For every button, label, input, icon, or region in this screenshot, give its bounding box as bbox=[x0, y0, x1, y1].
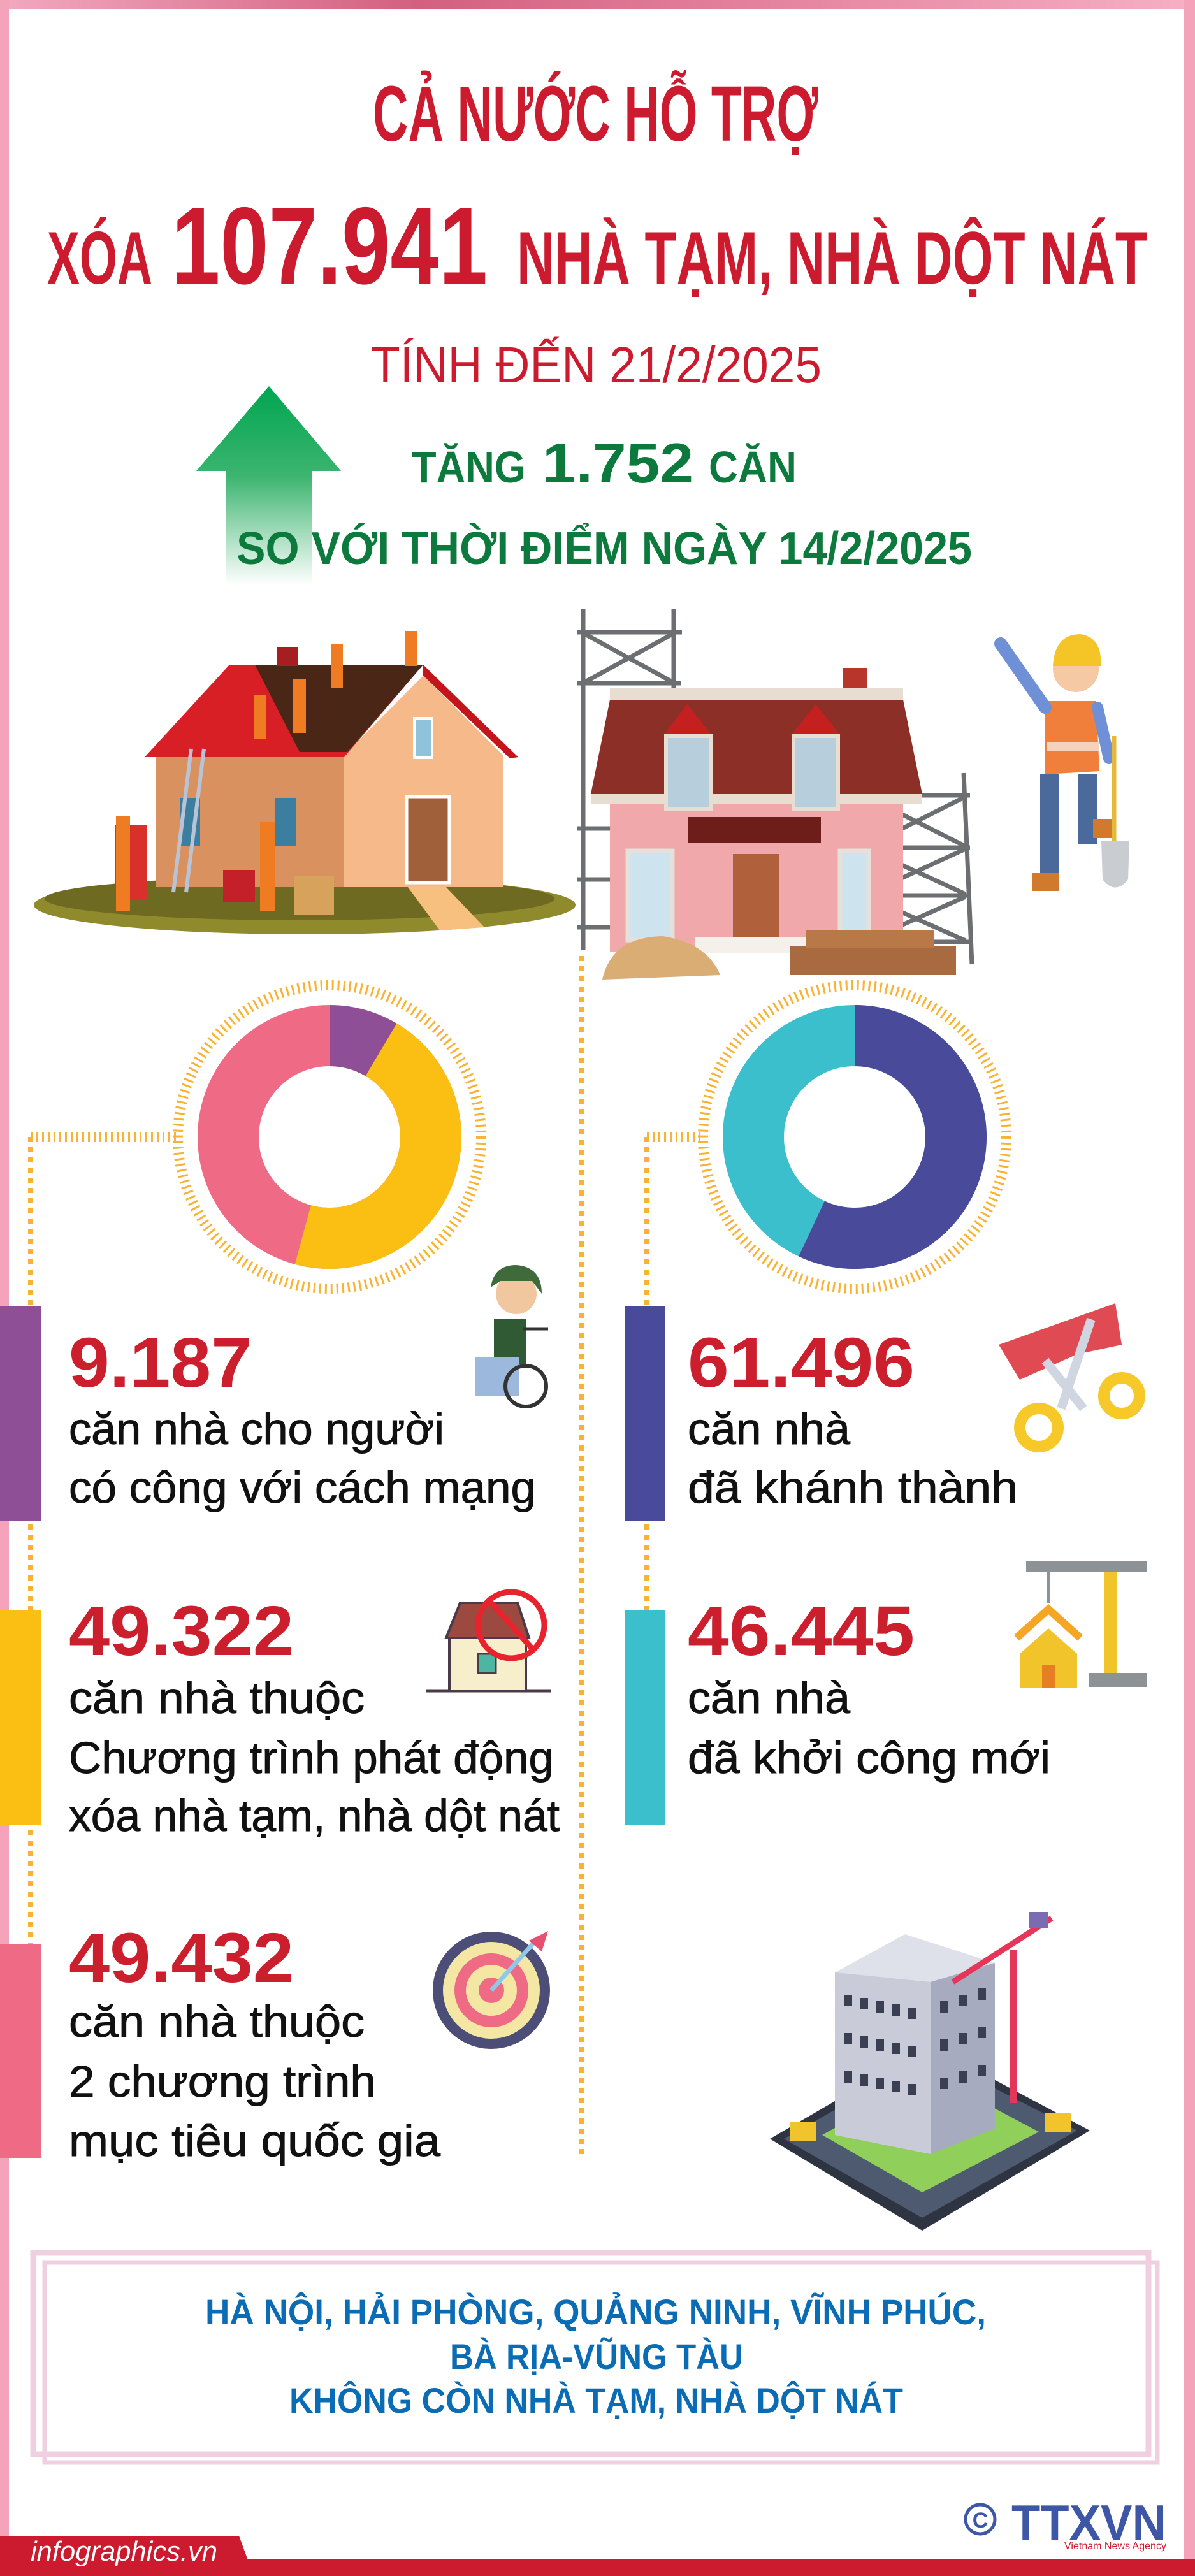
stat: 46.445 started: 46.445 bbox=[688, 1592, 915, 1670]
footer bar bbox=[0, 2536, 1195, 2576]
stat: 49.432 national target programmes: 2 chương trình bbox=[69, 2057, 376, 2106]
logo: TTXVN: TTXVN bbox=[1011, 2494, 1166, 2551]
stat: 46.445 started: căn nhà bbox=[688, 1673, 850, 1723]
stat: 46.445 started bbox=[625, 1592, 1050, 1825]
stat: 49.322 movement programme: Chương trình phát động bbox=[69, 1733, 554, 1783]
title line 1: CẢ NƯỚC HỖ TRỢ bbox=[373, 70, 818, 158]
callout box: provinces bbox=[33, 2253, 1157, 2463]
icon: veteran in wheelchair bbox=[475, 1265, 548, 1407]
increase text: CĂN bbox=[709, 442, 797, 492]
illustration: waving worker bbox=[1001, 634, 1129, 891]
stat: 49.432 national target programmes bbox=[0, 1919, 440, 2166]
stat: 9.187 revolution contributors: căn nhà cho người bbox=[69, 1404, 444, 1454]
stat: 49.322 movement programme: 49.322 bbox=[69, 1592, 294, 1670]
title line 2 bbox=[47, 185, 1147, 307]
icon: target bbox=[433, 1931, 550, 2049]
stat: 46.445 started: đã khởi công mới bbox=[688, 1733, 1050, 1783]
stat: 49.322 movement programme bbox=[0, 1592, 560, 1841]
logo: TTXVN: C bbox=[973, 2508, 988, 2533]
chart: donut by progress bbox=[703, 985, 1006, 1289]
callout box: provinces: BÀ RỊA-VŨNG TÀU bbox=[450, 2336, 743, 2377]
callout box: provinces: HÀ NỘI, HẢI PHÒNG, QUẢNG NINH, VĨNH PHÚC, bbox=[205, 2292, 986, 2332]
stat: 49.432 national target programmes: căn nhà thuộc bbox=[69, 1997, 365, 2046]
logo: TTXVN: Vietnam News Agency bbox=[1064, 2541, 1166, 2552]
increase text: SO VỚI THỜI ĐIỂM NGÀY 14/2/2025 bbox=[236, 523, 972, 574]
title line 2: 107.941 bbox=[171, 185, 488, 307]
icon: green up arrow bbox=[196, 386, 341, 585]
title line 2: XÓA bbox=[47, 216, 152, 300]
increase text bbox=[236, 431, 972, 574]
footer bar: infographics.vn bbox=[31, 2536, 217, 2567]
stat: 49.322 movement programme: xóa nhà tạm, nhà dột nát bbox=[69, 1791, 560, 1841]
illustration: house under roof repair bbox=[34, 631, 576, 934]
increase text: 1.752 bbox=[542, 431, 693, 495]
chart: donut by programme bbox=[178, 985, 481, 1289]
increase text: TĂNG bbox=[412, 442, 526, 492]
stat: 61.496 inaugurated bbox=[625, 1306, 1018, 1521]
stat: 9.187 revolution contributors: 9.187 bbox=[69, 1324, 252, 1402]
stat: 49.432 national target programmes: mục tiêu quốc gia bbox=[69, 2116, 440, 2166]
stat: 9.187 revolution contributors bbox=[0, 1306, 536, 1521]
stat: 61.496 inaugurated: đã khánh thành bbox=[688, 1463, 1018, 1512]
icon: crane with house bbox=[1017, 1561, 1147, 1688]
stat: 9.187 revolution contributors: có công với cách mạng bbox=[69, 1463, 536, 1512]
icon: ribbon scissors bbox=[999, 1303, 1140, 1447]
stat: 49.322 movement programme: căn nhà thuộc bbox=[69, 1673, 365, 1723]
subtitle date: TÍNH ĐẾN 21/2/2025 bbox=[371, 336, 822, 393]
connector lines (dotted) bbox=[31, 956, 704, 2154]
icon: prohibited old house bbox=[426, 1592, 551, 1691]
stat: 61.496 inaugurated: căn nhà bbox=[688, 1404, 850, 1454]
stat: 61.496 inaugurated: 61.496 bbox=[688, 1324, 915, 1402]
callout box: provinces: KHÔNG CÒN NHÀ TẠM, NHÀ DỘT NÁT bbox=[289, 2380, 903, 2420]
illustration: pink house with scaffolding bbox=[577, 609, 972, 980]
stat: 49.432 national target programmes: 49.432 bbox=[69, 1919, 294, 1997]
illustration: building under construction bbox=[770, 1912, 1090, 2231]
